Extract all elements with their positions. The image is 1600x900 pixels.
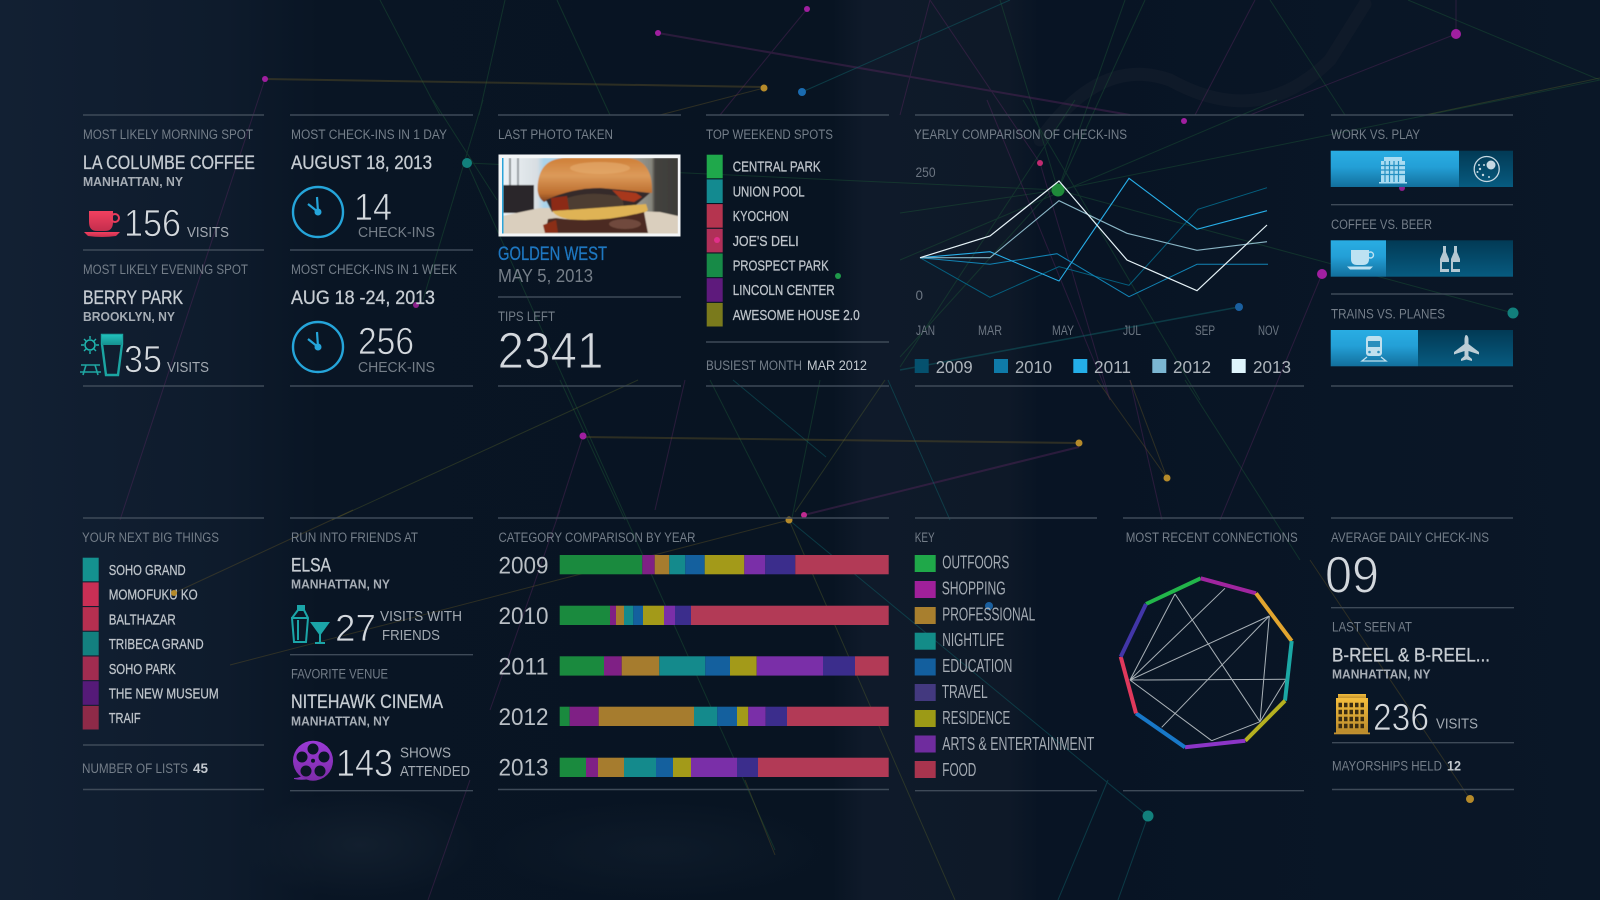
legend: years: 2012 xyxy=(1173,357,1211,377)
legend: years: 2009 xyxy=(936,357,973,377)
stat: 143 shows attended: 143 xyxy=(336,743,393,785)
heading: last photo taken: LAST PHOTO TAKEN xyxy=(498,127,613,143)
heading: favorite venue: FAVORITE VENUE xyxy=(291,667,388,683)
photo: burger xyxy=(498,154,680,236)
icon: clock xyxy=(293,322,343,372)
heading: top weekend spots: TOP WEEKEND SPOTS xyxy=(706,127,833,143)
stacked bar: 2012: 2012 xyxy=(498,704,548,731)
stat: 14 check-ins: CHECK-INS xyxy=(358,224,435,241)
heading: most likely morning spot: MOST LIKELY MORNING SPOT xyxy=(83,127,253,143)
panel: most recent connections xyxy=(1121,518,1304,791)
stat: 256 check-ins: CHECK-INS xyxy=(358,359,435,376)
icon: film reel xyxy=(293,741,333,781)
stat: 143 shows attended: ATTENDED xyxy=(400,764,470,780)
stat: 236 visits xyxy=(1373,697,1478,739)
stacked bar: 2011 xyxy=(498,654,889,681)
stat: number of lists: 45 xyxy=(193,760,208,776)
venue: La Columbe Coffee: LA COLUMBE COFFEE xyxy=(83,153,255,174)
line chart xyxy=(920,178,1268,297)
legend: categories: PROFESSIONAL xyxy=(942,604,1035,624)
venue: Berry Park: BERRY PARK xyxy=(83,288,183,309)
legend: categories: TRAVEL xyxy=(942,682,988,702)
list: next big things: THE NEW MUSEUM xyxy=(109,686,219,702)
stacked bar: 2012 xyxy=(498,704,889,731)
list: weekend spots: CENTRAL PARK xyxy=(733,160,821,176)
list: next big things: MOMOFUKU KO xyxy=(109,588,198,604)
list: next big things xyxy=(83,558,219,730)
panel: versus bars xyxy=(1331,115,1513,386)
stacked bar: 2010 xyxy=(498,603,889,630)
chart: connection ring xyxy=(1121,578,1292,747)
stacked bar: 2013: 2013 xyxy=(498,755,548,782)
legend: years: 2011 xyxy=(1094,357,1131,377)
icon: beer garden xyxy=(80,335,122,375)
stacked bar: 2009 xyxy=(498,552,889,579)
stat: busiest month: MAR 2012 xyxy=(807,357,867,373)
stat: 143 shows attended: SHOWS xyxy=(400,746,451,762)
list: next big things: TRAIF xyxy=(109,711,141,727)
y axis labels: 250 xyxy=(916,165,936,180)
stat: 27 visits with friends: 27 xyxy=(335,608,376,650)
stacked bar: 2013 xyxy=(498,755,889,782)
venue: Golden West: GOLDEN WEST xyxy=(498,244,607,265)
legend: categories: OUTFOORS xyxy=(942,552,1009,572)
heading: category comparison by year: CATEGORY COMPARISON BY YEAR xyxy=(498,530,696,546)
stat: 156 visits: VISITS xyxy=(187,225,229,241)
stat: 27 visits with friends xyxy=(335,608,462,650)
legend: categories: FOOD xyxy=(942,760,976,780)
dashboard panels xyxy=(80,114,1514,792)
legend: categories: ARTS & ENTERTAINMENT xyxy=(942,734,1094,754)
legend: categories: RESIDENCE xyxy=(942,708,1010,728)
stacked bar: 2009: 2009 xyxy=(498,552,548,579)
heading: key: KEY xyxy=(915,530,935,546)
stat: 35 visits xyxy=(124,339,209,381)
heading: most check-ins in 1 week: MOST CHECK-INS IN 1 WEEK xyxy=(291,262,457,278)
icon: train xyxy=(1362,336,1386,361)
stat: 236 visits: 236 xyxy=(1373,697,1429,739)
panel: most check-ins xyxy=(290,115,473,386)
panel: top weekend spots xyxy=(706,115,889,386)
list: weekend spots: LINCOLN CENTER xyxy=(733,283,835,299)
date: August 18, 2013: AUGUST 18, 2013 xyxy=(291,153,432,174)
icon: beer bottles xyxy=(1440,246,1460,272)
bar: work vs. play xyxy=(1331,151,1513,187)
bar: trains vs. planes xyxy=(1331,330,1513,366)
x axis labels: MAR xyxy=(978,323,1002,338)
stat: busiest month: BUSIEST MONTH xyxy=(706,358,802,374)
list: next big things: BALTHAZAR xyxy=(109,612,176,628)
location: Manhattan: MANHATTAN, NY xyxy=(291,578,391,592)
stat: 156 visits: 156 xyxy=(124,203,181,245)
stat: mayorships held: 12 xyxy=(1447,758,1461,774)
y axis labels: 0 xyxy=(916,288,923,303)
x axis labels: JAN xyxy=(916,323,935,338)
icon: coffee cup xyxy=(1347,250,1374,270)
stat: mayorships held: MAYORSHIPS HELD xyxy=(1332,759,1442,775)
heading: most likely evening spot: MOST LIKELY EVENING SPOT xyxy=(83,262,248,278)
x axis labels xyxy=(916,323,1279,338)
icon: airplane xyxy=(1454,335,1479,361)
icon: gold building xyxy=(1334,694,1370,734)
list: weekend spots: PROSPECT PARK xyxy=(733,258,829,274)
stat: 09: 09 xyxy=(1325,547,1379,605)
list: weekend spots: KYOCHON xyxy=(733,209,789,225)
location: Brooklyn: BROOKLYN, NY xyxy=(83,310,176,324)
list: weekend spots: AWESOME HOUSE 2.0 xyxy=(733,308,860,324)
x axis labels: JUL xyxy=(1123,323,1141,338)
x axis labels: MAY xyxy=(1052,323,1074,338)
list: weekend spots: JOE'S DELI xyxy=(733,234,799,250)
panel: next big things xyxy=(82,518,264,790)
list: next big things: SOHO PARK xyxy=(109,662,176,678)
panel: morning and evening spots xyxy=(80,115,264,386)
icon: disco ball xyxy=(1474,156,1499,182)
stat: 14 check-ins: 14 xyxy=(354,187,392,229)
legend: categories: SHOPPING xyxy=(942,578,1006,598)
x axis labels: SEP xyxy=(1195,323,1215,338)
legend: years xyxy=(915,357,1291,377)
y axis labels xyxy=(916,165,936,303)
x axis labels: NOV xyxy=(1258,323,1279,338)
legend: categories: NIGHTLIFE xyxy=(942,630,1004,650)
panel: category comparison by year xyxy=(498,518,889,790)
heading: coffee vs. beer: COFFEE VS. BEER xyxy=(1331,217,1432,233)
heading: work vs. play: WORK VS. PLAY xyxy=(1331,127,1420,143)
stat: 236 visits: VISITS xyxy=(1436,716,1478,732)
stat: 14 check-ins xyxy=(354,187,435,241)
location: Manhattan: MANHATTAN, NY xyxy=(291,714,391,728)
heading: your next big things: YOUR NEXT BIG THINGS xyxy=(82,530,219,546)
legend: years: 2013 xyxy=(1253,357,1291,377)
legend: categories: EDUCATION xyxy=(942,656,1012,676)
panel: last photo and tips xyxy=(498,115,681,386)
heading: trains vs. planes: TRAINS VS. PLANES xyxy=(1331,306,1445,322)
stat: 27 visits with friends: VISITS WITH xyxy=(380,609,462,625)
date: May 5, 2013: MAY 5, 2013 xyxy=(498,266,593,286)
panel: daily check-ins and last seen xyxy=(1325,518,1514,790)
heading: average daily check-ins: AVERAGE DAILY CHECK-INS xyxy=(1331,530,1489,546)
location: Manhattan: MANHATTAN, NY xyxy=(83,175,184,189)
list: weekend spots: UNION POOL xyxy=(733,184,805,200)
stacked bar: 2010: 2010 xyxy=(498,603,548,630)
icon: clock xyxy=(293,187,343,237)
stat: 2341 tips: 2341 xyxy=(498,322,604,379)
heading: yearly comparison of check-ins: YEARLY COMPARISON OF CHECK-INS xyxy=(914,127,1127,143)
location: Manhattan: MANHATTAN, NY xyxy=(1332,667,1431,681)
list: next big things: TRIBECA GRAND xyxy=(109,637,204,653)
venue: Nitehawk Cinema: NITEHAWK CINEMA xyxy=(291,692,443,713)
heading: most check-ins in 1 day: MOST CHECK-INS IN 1 DAY xyxy=(291,127,447,143)
heading: tips left: TIPS LEFT xyxy=(498,309,555,325)
stat: number of lists: NUMBER OF LISTS xyxy=(82,761,188,777)
stat: 256 check-ins: 256 xyxy=(358,321,414,363)
stat: 156 visits xyxy=(124,203,229,245)
venue: B-Reel & B-Reel: B-REEL & B-REEL... xyxy=(1332,646,1490,667)
list: weekend spots xyxy=(707,155,860,326)
icon: cocktail shaker and glass xyxy=(291,606,328,643)
stat: 35 visits: VISITS xyxy=(167,360,209,376)
stacked bar: 2011: 2011 xyxy=(498,654,548,681)
panel: yearly comparison line chart xyxy=(914,115,1304,386)
legend: years: 2010 xyxy=(1015,357,1052,377)
venue: Elsa: ELSA xyxy=(291,556,331,577)
panel: friends and favourite venue xyxy=(290,518,473,791)
heading: most recent connections: MOST RECENT CONNECTIONS xyxy=(1126,530,1298,546)
icon: office building xyxy=(1379,157,1407,184)
date: Aug 18-24, 2013: AUG 18 -24, 2013 xyxy=(291,288,435,309)
stat: 143 shows attended xyxy=(336,743,470,785)
stat: 256 check-ins xyxy=(358,321,435,376)
panel: category key xyxy=(915,518,1097,791)
stat: 35 visits: 35 xyxy=(124,339,162,381)
heading: run into friends at: RUN INTO FRIENDS AT xyxy=(291,530,418,546)
bar: coffee vs. beer xyxy=(1331,240,1513,277)
stat: 27 visits with friends: FRIENDS xyxy=(382,628,440,644)
legend: categories xyxy=(915,552,1094,780)
stat: busiest month xyxy=(706,357,867,374)
icon: coffee cup xyxy=(84,211,120,237)
list: next big things: SOHO GRAND xyxy=(109,563,186,579)
heading: last seen at: LAST SEEN AT xyxy=(1332,620,1412,636)
